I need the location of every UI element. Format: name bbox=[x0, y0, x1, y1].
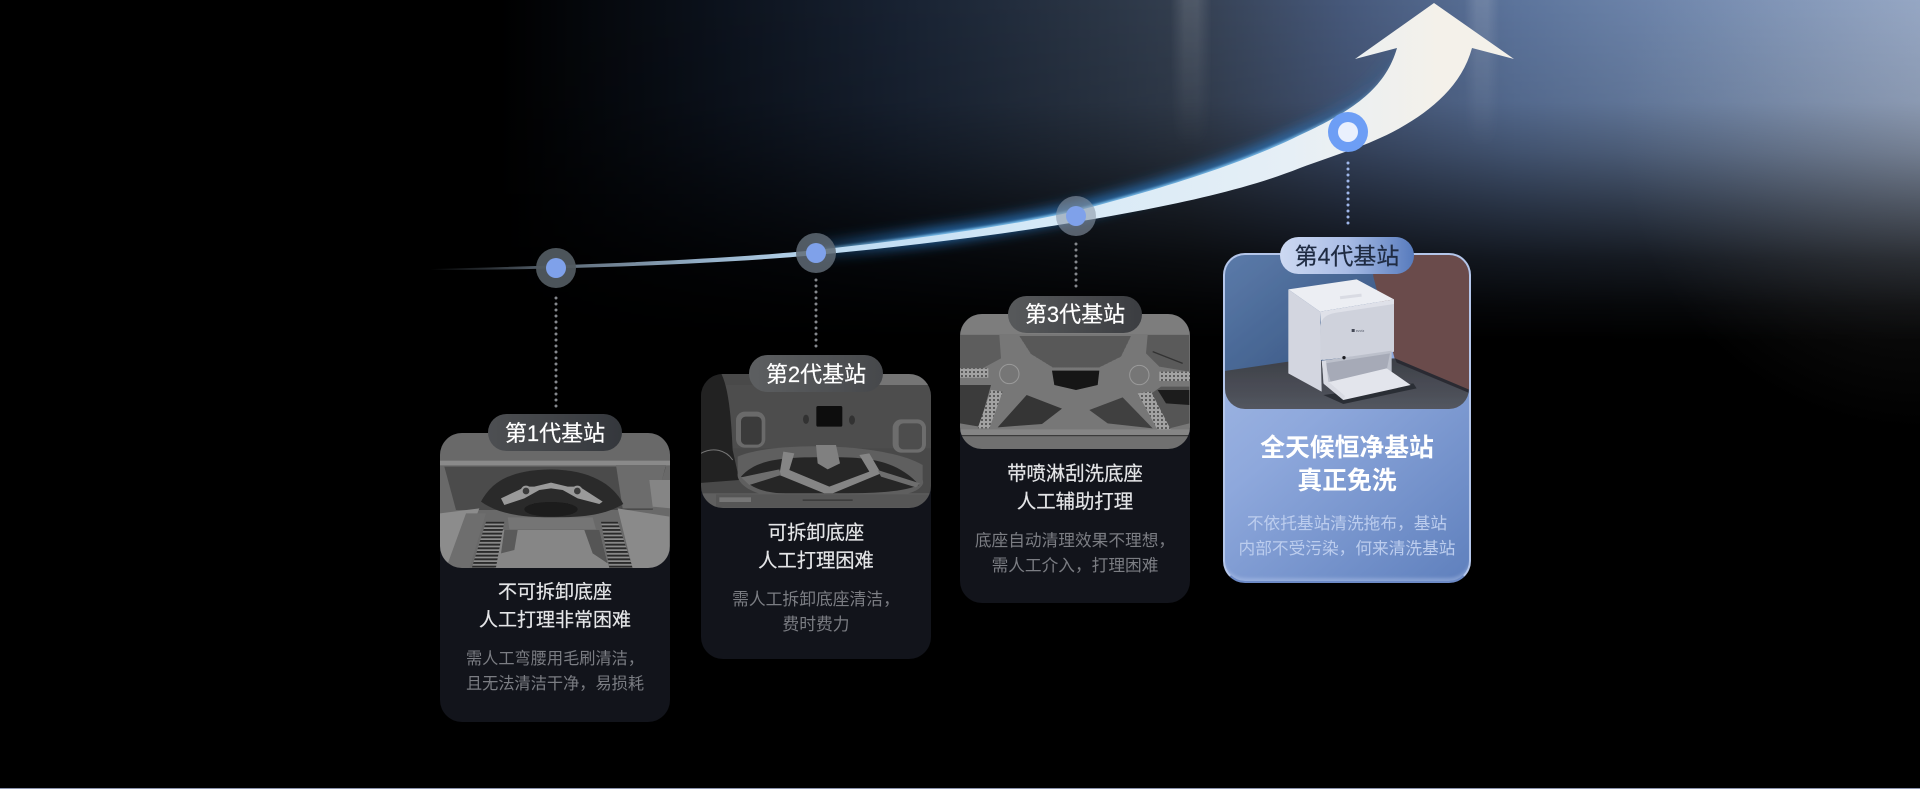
photo: robot base station bbox=[1225, 255, 1469, 409]
badge: generation 3: 第3代基站 bbox=[1025, 302, 1125, 327]
title: generation 1: 人工打理非常困难 bbox=[479, 610, 631, 631]
node 3 bbox=[1056, 196, 1096, 236]
description: generation 4: 内部不受污染，何来清洗基站 bbox=[1239, 539, 1455, 558]
title: generation 4 bbox=[1260, 434, 1434, 495]
dotted connectors bbox=[554, 162, 1350, 408]
node 1 bbox=[536, 248, 576, 288]
description: generation 3: 底座自动清理效果不理想， bbox=[975, 531, 1175, 550]
node 2 bbox=[796, 233, 836, 273]
description: generation 1 bbox=[466, 650, 644, 693]
title: generation 1 bbox=[479, 582, 631, 631]
description: generation 3 bbox=[975, 531, 1175, 575]
panel: generation 3 bbox=[960, 296, 1190, 603]
badge: generation 2 bbox=[749, 355, 883, 392]
title: generation 1: 不可拆卸底座 bbox=[498, 582, 612, 603]
panel: generation 4 highlight bbox=[1223, 237, 1471, 583]
badge: generation 4: 第4代基站 bbox=[1295, 243, 1399, 269]
badge: generation 3 bbox=[1008, 296, 1142, 333]
growth arrow curve with nodes bbox=[440, 3, 1514, 288]
badge: generation 1 bbox=[488, 414, 622, 451]
photo: generation 1 base bbox=[440, 433, 670, 568]
description: generation 2 bbox=[732, 590, 900, 634]
title: generation 3: 人工辅助打理 bbox=[1017, 491, 1133, 513]
description: generation 4: 不依托基站清洗拖布，基站 bbox=[1247, 514, 1447, 533]
title: generation 3: 带喷淋刮洗底座 bbox=[1007, 463, 1143, 485]
badge: generation 1: 第1代基站 bbox=[505, 421, 605, 446]
description: generation 2: 需人工拆卸底座清洁， bbox=[732, 590, 900, 609]
badge: generation 4 bbox=[1280, 237, 1414, 274]
description: generation 3: 需人工介入，打理困难 bbox=[992, 556, 1158, 575]
description: generation 4 bbox=[1239, 514, 1455, 558]
photo: generation 3 base bbox=[960, 314, 1190, 449]
title: generation 4: 全天候恒净基站 bbox=[1260, 435, 1434, 462]
title: generation 2: 人工打理困难 bbox=[758, 551, 874, 572]
panel: generation 1 bbox=[440, 414, 670, 722]
panel: generation 2 bbox=[701, 355, 931, 659]
badge: generation 2: 第2代基站 bbox=[766, 362, 866, 387]
title: generation 3 bbox=[1007, 463, 1143, 513]
node 4 bbox=[1328, 112, 1368, 152]
title: generation 4: 真正免洗 bbox=[1297, 468, 1397, 495]
photo: generation 2 base bbox=[701, 374, 931, 508]
description: generation 2: 费时费力 bbox=[782, 615, 850, 634]
description: generation 1: 且无法清洁干净，易损耗 bbox=[466, 675, 644, 693]
photo: robot base station: ezviz bbox=[1356, 329, 1365, 333]
title: generation 2 bbox=[758, 522, 874, 572]
description: generation 1: 需人工弯腰用毛刷清洁， bbox=[466, 650, 644, 668]
title: generation 2: 可拆卸底座 bbox=[768, 523, 864, 544]
